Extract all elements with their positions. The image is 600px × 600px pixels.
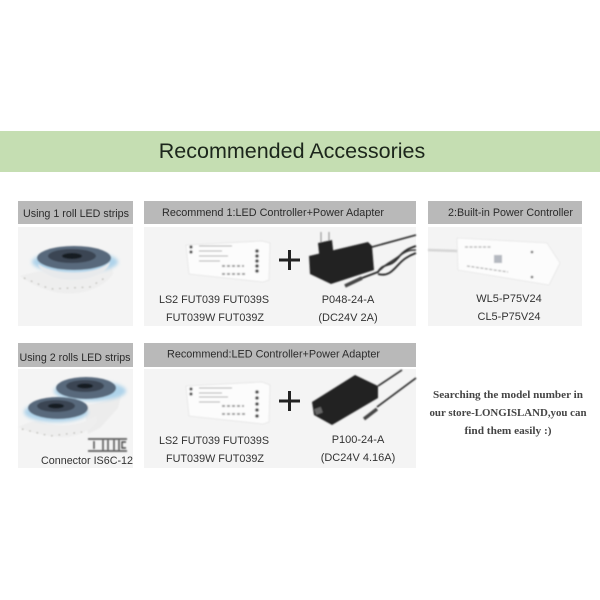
icon: plus (279, 391, 300, 411)
title: Recommended Accessories (159, 139, 425, 163)
label: connector: Connector IS6C-12 (41, 455, 133, 467)
label: adapter model (318, 294, 378, 324)
label: built-in models: CL5-P75V24 (478, 311, 540, 323)
label: built-in models (476, 293, 542, 323)
label: adapter model: P048-24-A (322, 294, 375, 306)
label: adapter model: (DC24V 2A) (318, 312, 378, 324)
title banner (0, 131, 600, 172)
heading: recommend 1 (144, 201, 416, 224)
label: controller models: LS2 FUT039 FUT039S (159, 435, 269, 447)
panel: built-in power controller (428, 201, 582, 326)
heading: using 2 rolls: Using 2 rolls LED strips (20, 352, 131, 364)
heading: built-in (428, 201, 582, 224)
text block: store search note: our store-LONGISLAND,you can (430, 407, 586, 419)
label: adapter model: (DC24V 4.16A) (321, 452, 395, 464)
label: adapter model: P100-24-A (332, 434, 385, 446)
label: controller models (159, 435, 269, 465)
label: built-in models: WL5-P75V24 (476, 293, 542, 305)
heading: recommend (144, 343, 416, 367)
label: controller models: LS2 FUT039 FUT039S (159, 294, 269, 306)
label: controller models: FUT039W FUT039Z (166, 453, 264, 465)
heading: recommend 1: Recommend 1:LED Controller+Power Adapter (162, 207, 384, 219)
label: adapter model (321, 434, 395, 464)
panel: using 1 roll LED strips (18, 201, 133, 326)
label: controller models (159, 294, 269, 324)
label: controller models: FUT039W FUT039Z (166, 312, 264, 324)
heading: built-in: 2:Built-in Power Controller (448, 207, 573, 219)
panel: recommend controller and power adapter (144, 343, 416, 468)
text block: store search note (430, 389, 586, 437)
icon: built-in controller (428, 238, 560, 285)
icon: two LED strip rolls (18, 377, 126, 437)
icon: connector (88, 439, 127, 451)
text block: store search note: find them easily :) (464, 425, 552, 437)
icon: plug adapter (309, 232, 416, 286)
icon: LED strip roll (20, 246, 118, 294)
text block: store search note: Searching the model number in (433, 389, 583, 401)
icon: LED controller (186, 241, 270, 282)
icon: plus (279, 250, 300, 270)
panel: using 2 rolls LED strips (18, 343, 133, 468)
heading: using 1 roll: Using 1 roll LED strips (23, 208, 129, 220)
heading: recommend: Recommend:LED Controller+Power Adapter (167, 348, 380, 360)
panel: recommend 1 controller and power adapter (144, 201, 416, 326)
icon: LED controller (186, 382, 270, 424)
icon: desktop power adapter (312, 370, 416, 425)
